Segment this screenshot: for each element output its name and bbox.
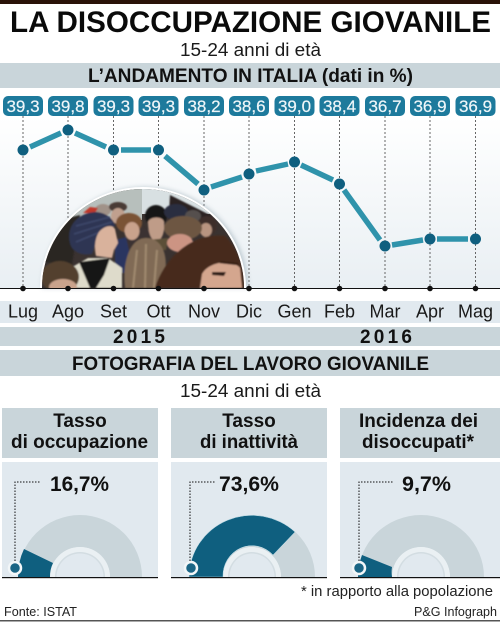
months band: Ott xyxy=(146,302,171,322)
panel: inactivity rate: di inattività xyxy=(200,432,298,453)
section heading: trend: L’ANDAMENTO IN ITALIA (dati in %) xyxy=(88,66,413,87)
months band: Dic xyxy=(236,302,262,322)
value labels: 39,0 xyxy=(278,97,311,116)
data points xyxy=(18,124,481,252)
months band: Apr xyxy=(416,302,444,322)
months band: Gen xyxy=(277,302,312,322)
value labels: 39,8 xyxy=(51,97,85,116)
panel: unemployed share: Incidenza dei xyxy=(359,411,478,432)
panel: unemployed share xyxy=(340,408,500,577)
gauge: 9,7% xyxy=(353,515,484,577)
gauge: 16,7% xyxy=(9,515,142,577)
photo: young crowd xyxy=(40,187,248,295)
panel: inactivity rate xyxy=(171,408,327,577)
value labels: 39,3 xyxy=(6,97,40,116)
subtitle: 15-24 anni di età xyxy=(180,39,322,60)
panel: unemployed share: 9,7% xyxy=(402,473,451,496)
gauge: 73,6% xyxy=(185,515,315,577)
value labels: 36,9 xyxy=(413,97,447,116)
months band xyxy=(0,301,500,323)
years band: 2015 xyxy=(113,327,165,348)
top bar xyxy=(0,0,500,4)
value labels: 36,7 xyxy=(368,97,402,116)
trend line xyxy=(30,133,468,245)
credit: P&G Infograph xyxy=(414,604,497,619)
panel: unemployed share: disoccupati* xyxy=(362,432,475,453)
months band: Set xyxy=(100,302,127,322)
months band: Mar xyxy=(370,302,401,322)
section heading: trend xyxy=(0,63,500,88)
panel: inactivity rate: 73,6% xyxy=(219,473,279,496)
months band: Mag xyxy=(458,302,493,322)
months band: Lug xyxy=(8,302,38,322)
panel: employment rate: di occupazione xyxy=(11,432,148,453)
value labels: 38,6 xyxy=(232,97,266,116)
panel: inactivity rate: Tasso xyxy=(222,411,276,432)
footnote: * in rapporto alla popolazione xyxy=(301,584,493,600)
panel baseline xyxy=(2,577,500,578)
panel: employment rate xyxy=(2,408,158,577)
axis xyxy=(0,286,500,291)
value labels: 36,9 xyxy=(459,97,492,116)
section heading: youth work: FOTOGRAFIA DEL LAVORO GIOVANILE xyxy=(72,354,429,375)
title: LA DISOCCUPAZIONE GIOVANILE xyxy=(10,6,491,39)
value labels: 38,4 xyxy=(323,97,356,116)
section heading: youth work xyxy=(0,350,500,376)
months band: Ago xyxy=(52,302,84,322)
value labels xyxy=(3,96,496,116)
panel: employment rate: Tasso xyxy=(53,411,107,432)
years band xyxy=(0,327,500,348)
panel: employment rate: 16,7% xyxy=(50,473,109,496)
months band: Feb xyxy=(324,302,355,322)
value labels: 39,3 xyxy=(142,97,175,116)
years band: 2016 xyxy=(360,327,412,348)
months band: Nov xyxy=(188,302,220,322)
line chart xyxy=(0,116,500,295)
source: Fonte: ISTAT xyxy=(4,604,77,619)
subtitle 2: 15-24 anni di età xyxy=(180,380,322,401)
value labels: 38,2 xyxy=(187,97,221,116)
value labels: 39,3 xyxy=(97,97,130,116)
